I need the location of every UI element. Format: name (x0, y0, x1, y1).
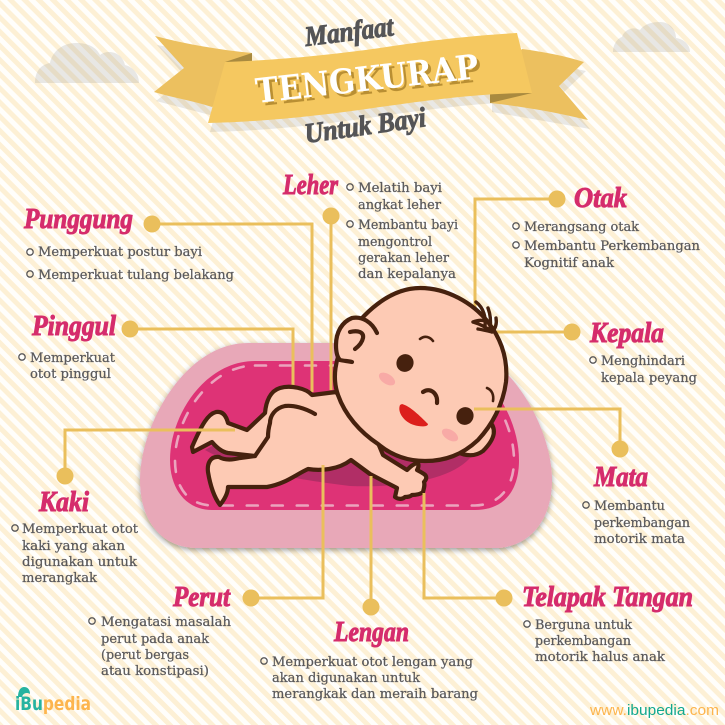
heading: Leher: Leher (282, 169, 339, 201)
far arm (458, 420, 494, 455)
panel: Leher (282, 169, 458, 282)
bullet list: dan kepalanya (358, 267, 456, 282)
heading: Kaki: Kaki (38, 486, 89, 518)
heading: Manfaat: Manfaat (302, 11, 396, 53)
panel: Pinggul (19, 310, 138, 382)
bullet list: perkembangan (594, 516, 691, 531)
marker dot (56, 468, 74, 484)
bullet list: Melatih bayi (358, 181, 442, 196)
heading: Otak: Otak (574, 182, 627, 214)
marker dot (496, 590, 512, 606)
marker dot (144, 216, 160, 232)
bullet list: akan digunakan untuk (272, 671, 420, 686)
bullet list: kaki yang akan (22, 539, 126, 554)
body (192, 387, 426, 505)
ear fill (336, 318, 378, 364)
eyebrow (420, 337, 433, 341)
bullet list: Mengatasi masalah (101, 615, 232, 630)
heading: Kepala: Kepala (589, 317, 664, 349)
heading: Untuk Bayi: Untuk Bayi (303, 102, 428, 150)
bullet list: Menghindari (601, 354, 685, 369)
bullet list: Merangsang otak (524, 220, 639, 235)
bullet list (513, 220, 701, 271)
panel: Otak (513, 182, 701, 271)
ribbon fold left (225, 53, 252, 63)
baby illustration (192, 288, 506, 505)
bullet list: Berguna untuk (535, 618, 632, 633)
bullet list (524, 618, 665, 665)
bullet list: motorik halus anak (535, 650, 665, 665)
panel: Punggung (23, 203, 234, 283)
bullet list: merangkak dan meraih barang (272, 687, 478, 702)
connector lines (130, 199, 572, 392)
bullet list: atau konstipasi) (101, 664, 209, 679)
ribbon fold right (490, 93, 532, 103)
bullet list: gerakan leher (358, 251, 450, 266)
heading: Pinggul: Pinggul (31, 310, 117, 342)
panel: Mata (583, 440, 691, 547)
marker dot (612, 440, 628, 458)
left eye (393, 351, 417, 375)
bullet list: Kognitif anak (524, 256, 614, 271)
panel: Kaki (12, 468, 139, 586)
nose (423, 390, 437, 403)
bullet list: Membantu (594, 499, 665, 514)
ribbon left tail (154, 36, 252, 107)
heading: Punggung: Punggung (23, 203, 133, 235)
bullet list (19, 351, 116, 382)
body crease line (255, 406, 315, 456)
panel: Perut (89, 581, 260, 679)
bullet list (27, 245, 234, 283)
bullet list: digunakan untuk (22, 555, 137, 570)
bullet list: angkat leher (358, 198, 442, 213)
bullet list: perkembangan (535, 634, 632, 649)
bullet list: Memperkuat otot lengan yang (272, 655, 473, 670)
bullet list: perut pada anak (101, 632, 209, 647)
bullet list: mengontrol (358, 235, 432, 250)
mat inner (170, 361, 519, 510)
mat outer (140, 343, 552, 548)
heading: TENGKURAP shadow: TENGKURAP (257, 50, 484, 115)
bullet list: otot pinggul (30, 367, 111, 382)
marker dot (122, 320, 138, 338)
panel: Kepala (564, 317, 697, 386)
marker dot (362, 598, 380, 616)
bullet list: Memperkuat (30, 351, 116, 366)
bullet list: Memperkuat postur bayi (38, 245, 202, 260)
hair (473, 302, 496, 332)
heading: Mata: Mata (593, 461, 648, 493)
changing mat (140, 343, 552, 548)
panel: Lengan (261, 598, 478, 702)
marker dot (564, 324, 580, 340)
connector lines over baby (65, 409, 620, 607)
ribbon shadow (156, 42, 590, 132)
bullet list: (perut bergas (101, 648, 189, 663)
left cheek (377, 370, 397, 388)
website url: www.ibupedia.com (589, 702, 719, 719)
bullet list: merangkak (22, 571, 97, 586)
icon: right cloud (613, 22, 690, 52)
heading: Perut: Perut (172, 581, 231, 613)
mat stitching (175, 366, 514, 506)
right eye (453, 404, 477, 428)
title banner (154, 11, 590, 150)
marker dot (322, 208, 340, 224)
logo wordmark: iBupedia (15, 693, 91, 715)
marker dot (242, 590, 260, 606)
far eyebrow (487, 388, 493, 401)
bullet list: Membantu bayi (358, 218, 458, 233)
heading: TENGKURAP: TENGKURAP (254, 47, 481, 112)
right cheek (440, 426, 460, 444)
marker dot (548, 190, 566, 208)
bullet list (261, 655, 478, 702)
bullet list: Memperkuat otot (22, 522, 139, 537)
mouth (399, 404, 428, 426)
ear outline (336, 318, 377, 362)
bullet list: Memperkuat tulang belakang (38, 268, 234, 283)
logo figure (18, 687, 30, 697)
bullet list: Membantu Perkembangan (524, 239, 701, 254)
bullet list (590, 354, 697, 386)
heading: Telapak Tangan: Telapak Tangan (522, 581, 693, 613)
logo: iBupedia (15, 687, 91, 715)
ribbon main band (208, 33, 532, 123)
head (335, 288, 506, 461)
bullet list (12, 522, 139, 586)
heading: Lengan: Lengan (333, 616, 409, 648)
bullet list (347, 181, 458, 282)
bullet list: motorik mata (594, 532, 685, 547)
baby shadow (205, 425, 470, 486)
ribbon right tail (490, 49, 588, 120)
bullet list (583, 499, 691, 547)
panel: Telapak Tangan (496, 581, 693, 665)
bullet list: kepala peyang (601, 371, 697, 386)
bullet list (89, 615, 232, 679)
icon: left cloud (35, 43, 139, 83)
ear inner (350, 331, 363, 349)
